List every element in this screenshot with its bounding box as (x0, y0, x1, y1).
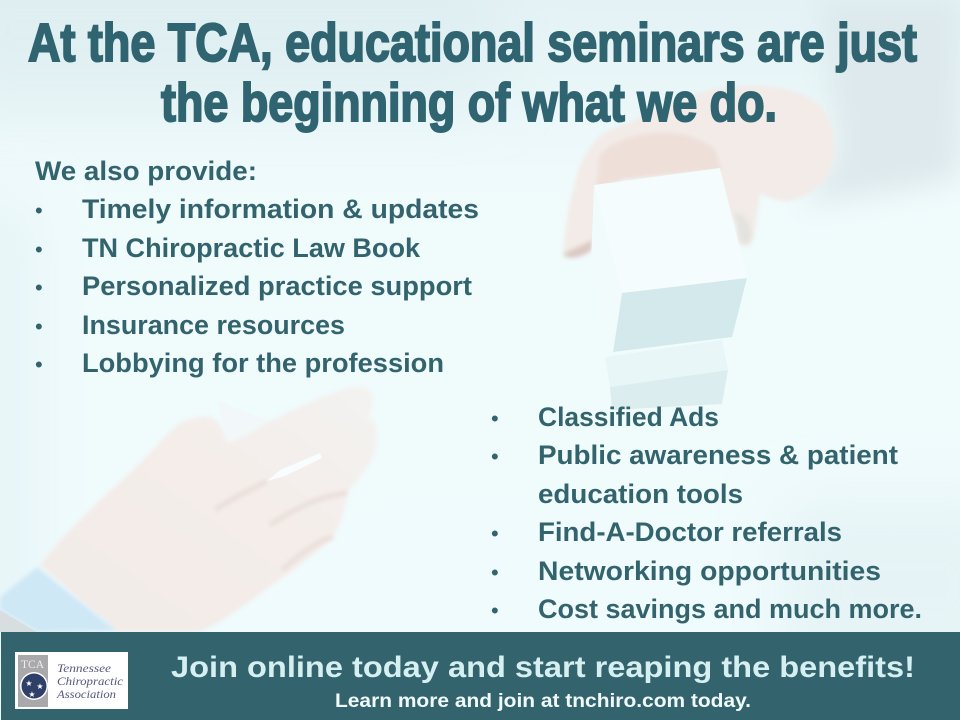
list: services, right column: • (491, 598, 499, 623)
list: services, right column: Networking opportunities (538, 556, 881, 586)
logo: Tennessee Chiropractic Association: ★ (28, 690, 36, 699)
list: services, right column: Find-A-Doctor referrals (538, 517, 842, 547)
white block (591, 168, 747, 410)
list: services, left column: Insurance resources (82, 310, 345, 340)
call to action: Join online today and start reaping the benefits! (171, 651, 915, 684)
list: services, right column: • (491, 521, 499, 546)
list: services, right column: education tools (538, 479, 743, 509)
list: services, left column: Timely information & updates (82, 194, 479, 224)
list: services, left column: • (35, 198, 43, 223)
list: services, left column: • (35, 275, 43, 300)
list: services, right column: Cost savings and much more. (538, 594, 922, 624)
list: services, right column (491, 402, 922, 624)
list: services, left column: We also provide: (35, 156, 257, 186)
web link line: Learn more and join at tnchiro.com today. (335, 691, 751, 712)
list: services, left column (35, 156, 479, 378)
list: services, left column: TN Chiropractic Law Book (82, 233, 421, 263)
list: services, left column: • (35, 314, 43, 339)
list: services, right column: • (491, 406, 499, 431)
list: services, right column: • (491, 444, 499, 469)
upper hand (563, 86, 835, 258)
list: services, right column: Public awareness & patient (538, 440, 898, 470)
lower hand (0, 378, 378, 632)
list: services, left column: • (35, 352, 43, 377)
list: services, right column: Classified Ads (538, 402, 719, 432)
title (28, 13, 917, 133)
shirt sleeve, upper right (800, 0, 960, 205)
logo: Tennessee Chiropractic Association: ★ (36, 682, 44, 691)
finger gap (267, 453, 322, 481)
list: services, left column: • (35, 237, 43, 262)
footer banner (1, 632, 960, 720)
logo: Tennessee Chiropractic Association (15, 652, 128, 709)
logo: Tennessee Chiropractic Association: TCA (21, 659, 45, 671)
logo: Tennessee Chiropractic Association: Association (56, 687, 116, 701)
logo: Tennessee Chiropractic Association: ★ (25, 679, 33, 688)
list: services, left column: Lobbying for the profession (82, 348, 444, 378)
logo: Tennessee Chiropractic Association: Chiropractic (57, 674, 124, 688)
list: services, left column: Personalized practice support (82, 271, 472, 301)
logo: Tennessee Chiropractic Association: Tennessee (57, 661, 112, 675)
list: services, right column: • (491, 560, 499, 585)
title: the beginning of what we do. (161, 73, 777, 133)
